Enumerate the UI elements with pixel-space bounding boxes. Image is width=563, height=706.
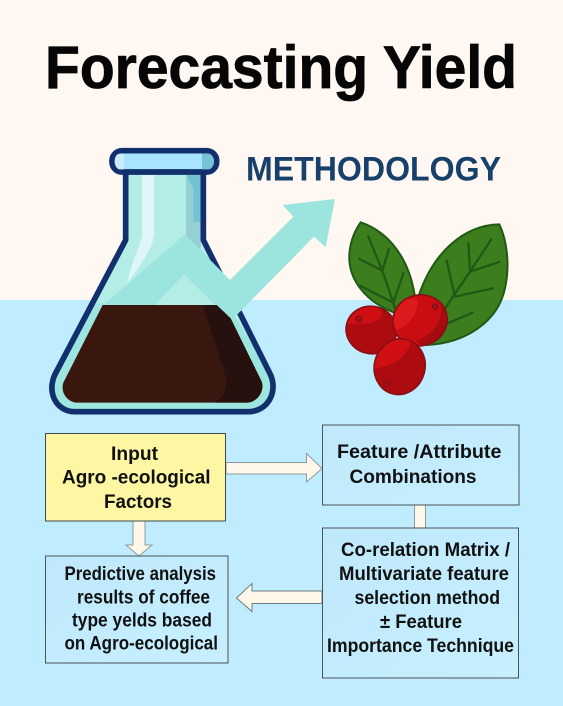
box: predictive results: on Agro-ecological: [64, 634, 218, 654]
box: feature combinations: [322, 425, 519, 505]
box: correlation matrix: selection method: [354, 588, 500, 609]
rising arrow: [103, 199, 335, 318]
arrow inner light fold: [155, 274, 215, 305]
right leaf: [419, 224, 507, 345]
box: predictive results: type yelds based: [72, 610, 212, 632]
title: Forecasting Yield: [45, 34, 517, 101]
box: correlation matrix: Multivariate feature: [339, 564, 509, 585]
coffee liquid: [63, 305, 262, 403]
box: feature combinations: Combinations: [350, 467, 476, 488]
box: input factors: Agro -ecological: [62, 468, 210, 488]
box: input factors: Input: [111, 444, 159, 465]
box: input factors: [46, 434, 226, 521]
berry left: [345, 305, 397, 355]
icon: conical flask with rising arrow: [52, 151, 335, 412]
connector: feature box to matrix box: [414, 505, 426, 528]
neck shadow: [186, 175, 201, 253]
berry right: [392, 294, 448, 347]
arrow: matrix to results: [236, 584, 322, 612]
box: feature combinations: Feature /Attribute: [337, 442, 502, 463]
flask cap: [112, 151, 217, 172]
box: correlation matrix: ± Feature: [380, 612, 462, 633]
berry bottom: [373, 338, 426, 396]
liquid shadow: [203, 305, 262, 403]
left leaf: [349, 222, 415, 313]
flask glass body: [52, 172, 273, 412]
icon: coffee leaves and berries: [341, 222, 507, 400]
flask inner rim: [52, 303, 273, 412]
box: correlation matrix: Co-relation Matrix /: [341, 540, 511, 561]
box: correlation matrix: Importance Technique: [327, 636, 514, 657]
box: predictive results: results of coffee: [77, 588, 210, 608]
arrow: input to results: [126, 521, 152, 556]
neck highlight: [127, 175, 154, 283]
arrow: input to feature: [226, 454, 322, 482]
box: input factors: Factors: [104, 492, 172, 513]
subtitle: methodology: METHODOLOGY: [246, 150, 501, 188]
box: correlation matrix: [322, 528, 518, 678]
flask outline: [52, 173, 273, 412]
box: predictive results: [46, 556, 228, 663]
box: predictive results: Predictive analysis: [64, 564, 216, 585]
